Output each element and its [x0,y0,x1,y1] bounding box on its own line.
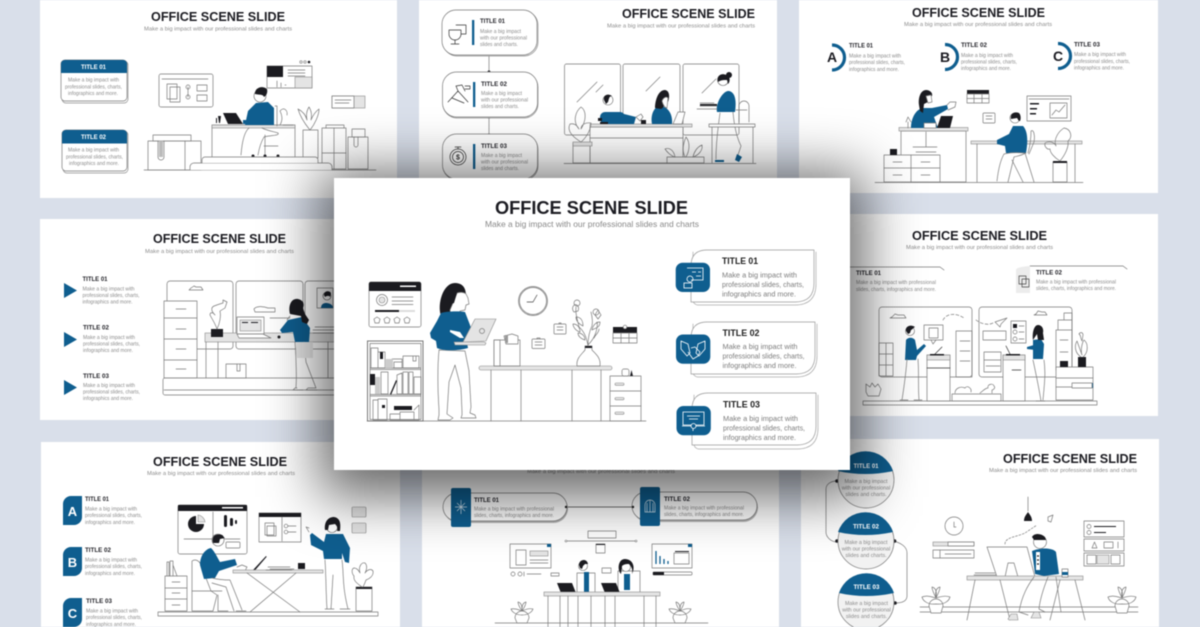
panel: slide middle right [845,214,1158,416]
card: title 02: professional slides, charts, [722,352,804,360]
filing cabinet [610,369,641,421]
card: title 01: with our professional [480,36,527,42]
illustration: woman and man at desks [875,90,1083,182]
card: title 02 [442,72,538,118]
item: title 01: TITLE 01 [82,276,108,283]
circle: title 02: TITLE 02 [853,524,880,530]
item C [1053,42,1130,72]
card: title 02: infographics and more. [722,361,796,370]
item A: infographics and more. [85,520,135,526]
card: title 02: with our professional [481,98,528,104]
sticky notes [532,323,566,348]
card: title 01 [442,10,538,56]
item: title 02 [64,324,140,354]
card: title 01: Make a big impact with [722,270,797,280]
card: title 01: professional slides, charts, [722,280,804,289]
item: title 01 [64,276,140,306]
icon: presentation [676,263,710,292]
icon: handshake [676,334,710,364]
item C: infographics and more. [1074,66,1124,72]
heading: OFFICE SCENE SLIDE [151,9,285,24]
panel: slide top centre [419,0,777,200]
illustration: two people at desk [495,531,708,627]
item A: A [68,504,78,519]
item C: TITLE 03 [86,598,113,605]
item B: B [68,555,77,570]
item B: professional slides, charts, [85,564,142,570]
card: title 03: TITLE 03 [723,400,760,410]
card: title 01: TITLE 01 [480,18,506,25]
item B [940,42,1017,72]
item C: Make a big impact with [1074,52,1126,58]
floor [367,420,646,422]
item: title 01: slides, charts, infographics and more. [856,287,936,293]
bookshelf [368,341,423,421]
item B: TITLE 02 [85,547,112,554]
item: title 02: Make a big impact with professional [1036,280,1116,286]
subheading: Make a big impact with our professional slides and charts [906,245,1053,251]
panel: slide bottom centre [422,460,779,627]
illustration: man at laptop and presenter [158,505,378,616]
panel: centre slide [334,178,850,470]
panel: slide top right [799,0,1158,193]
card: title 02: TITLE 02 [664,496,691,503]
illustration: man at desk [144,61,376,170]
card: title 01 [61,60,128,103]
item B: Make a big impact with [85,558,137,564]
heading: OFFICE SCENE SLIDE [1003,451,1137,466]
subheading: Make a big impact with our professional slides and charts [607,24,755,30]
subheading: Make a big impact with our professional slides and charts [147,471,295,477]
illustration: man at computer [920,497,1138,620]
subheading: Make a big impact with our professional slides and charts [485,220,699,229]
subheading: Make a big impact with our professional slides and charts [144,26,292,32]
card: title 01: TITLE 01 [722,256,758,266]
card: title 02: infographics and more. [69,161,119,167]
item A [827,42,905,73]
item C: professional slides, charts, [1074,59,1130,65]
card: title 03: Make a big impact [481,153,523,159]
card: title 02: slides and charts. [481,104,519,110]
item C [63,598,142,627]
heading: OFFICE SCENE SLIDE [912,228,1047,243]
panel: slide bottom right [801,439,1159,627]
item: title 01: Make a big impact with professional [856,280,936,286]
card: title 01: TITLE 01 [81,64,107,71]
icon: monitor [676,406,711,435]
circle: title 03 [838,573,894,627]
card: title 02: Make a big impact with [68,148,119,154]
item A: professional slides, charts, [85,513,142,519]
card: title 02: professional slides, charts, [66,154,123,160]
circle: title 02: slides and charts. [845,553,887,559]
item: title 02: professional slides, charts, [83,342,140,348]
centre slide shadow [320,172,864,497]
item: title 01: Make a big impact with [82,286,135,292]
circle: title 01 [838,451,894,508]
item: title 03: infographics and more. [83,396,133,402]
card: title 03: with our professional [481,160,528,166]
card: title 01: infographics and more. [68,91,118,97]
card: title 03: slides and charts. [481,166,519,172]
card: title 01: professional slides, charts, [65,84,122,90]
profile widget [369,282,421,327]
circle: title 03: TITLE 03 [854,584,880,591]
item B [63,547,142,577]
card: title 02 [62,130,128,173]
item C: C [1053,48,1063,64]
item C: Make a big impact with [86,608,138,614]
circle: title 02: with our professional [842,546,890,552]
card: title 03: professional slides, charts, [723,424,805,432]
item B: TITLE 02 [961,42,988,49]
card: title 02: Make a big impact with [722,342,798,351]
item: title 02: slides, charts, infographics and more. [1036,286,1116,292]
card: title 01: Make a big impact with professional [474,506,554,512]
item: title 02 [1016,266,1127,293]
circle: title 01: slides and charts. [845,492,887,498]
clock [518,286,548,316]
item: title 01 [850,267,944,293]
item: title 01: infographics and more. [82,300,132,306]
card: title 02: Make a big impact with professional [664,506,744,512]
circle: title 03: with our professional [842,608,891,614]
item: title 02: TITLE 02 [1036,270,1063,276]
card: title 03 [676,393,818,449]
card: title 02: TITLE 02 [481,81,508,88]
connectors [826,479,907,605]
item: title 02: TITLE 02 [83,324,110,332]
card: title 01: Make a big impact with [68,78,119,84]
connector [566,506,633,508]
circle: title 03: Make a big impact [845,601,889,607]
item C: TITLE 03 [1074,42,1101,48]
woman with laptop [430,283,496,420]
item A: Make a big impact with [85,506,137,512]
illustration: woman with laptop in office [367,282,646,421]
illustration: three colleagues [564,64,756,164]
subheading: Make a big impact with our professional slides and charts [527,469,675,475]
circle: title 02: Make a big impact [845,540,888,546]
item A: infographics and more. [849,67,899,73]
item C: C [68,606,78,621]
illustration: two colleagues [863,307,1097,405]
item: title 03: Make a big impact with [83,383,135,389]
item: title 01: professional slides, charts, [82,293,140,299]
heading: OFFICE SCENE SLIDE [153,231,286,246]
circle: title 01: Make a big impact [845,479,888,485]
card: title 03: infographics and more. [723,433,796,442]
circle: title 03: slides and charts. [846,614,887,620]
card: title 02 [632,487,758,526]
card: title 02: TITLE 02 [722,328,760,338]
circle: title 02 [838,512,894,569]
panel: slide top left [40,0,397,198]
subheading: Make a big impact with our professional slides and charts [904,22,1052,28]
card: title 02: slides, charts, infographics and more. [664,512,744,518]
card: title 02: Make a big impact [481,91,523,97]
circle: title 01: with our professional [842,486,890,492]
circle: title 01: TITLE 01 [854,463,879,470]
heading: OFFICE SCENE SLIDE [153,454,287,469]
item: title 01: TITLE 01 [856,270,882,277]
item A: Make a big impact with [849,54,901,60]
desk with items [479,300,637,421]
item A: A [827,49,837,65]
card: title 01: slides and charts. [480,42,518,48]
heading: OFFICE SCENE SLIDE [622,6,755,21]
panel: slide bottom left [41,442,400,627]
item C: professional slides, charts, [86,615,142,621]
subheading: Make a big impact with our professional slides and charts [145,249,294,255]
card: title 03: Make a big impact with [723,414,798,423]
subheading: Make a big impact with our professional slides and charts [989,468,1137,474]
heading: OFFICE SCENE SLIDE [912,5,1045,20]
item B: infographics and more. [961,66,1011,72]
heading: OFFICE SCENE SLIDE [495,197,688,218]
item B: B [940,49,950,65]
card: title 01: Make a big impact [480,29,522,35]
card: title 03 [442,134,538,180]
card: title 01: TITLE 01 [474,497,500,504]
item A: TITLE 01 [85,496,110,503]
card: title 01: slides, charts, infographics and more. [474,513,554,519]
card: title 01 [443,488,568,527]
item B: infographics and more. [85,571,135,577]
item A: TITLE 01 [849,42,874,50]
card: title 03: TITLE 03 [481,143,508,150]
item A [63,496,142,526]
item B: professional slides, charts, [961,60,1017,66]
connectors [488,53,490,136]
item: title 03: TITLE 03 [83,373,110,380]
card: title 02: TITLE 02 [81,134,107,141]
card: title 01 [676,250,816,305]
card: title 01: infographics and more. [722,290,796,298]
card: title 02 [676,322,817,377]
item A: professional slides, charts, [849,60,905,66]
item: title 02: infographics and more. [83,348,133,354]
item: title 02: Make a big impact with [83,335,135,341]
item: title 03: professional slides, charts, [83,390,140,396]
panel: slide middle left [40,219,343,420]
item: title 03 [64,373,140,402]
item B: Make a big impact with [961,53,1013,59]
illustration: woman at standing desk [163,281,343,395]
card: title 03: $ [456,154,460,162]
